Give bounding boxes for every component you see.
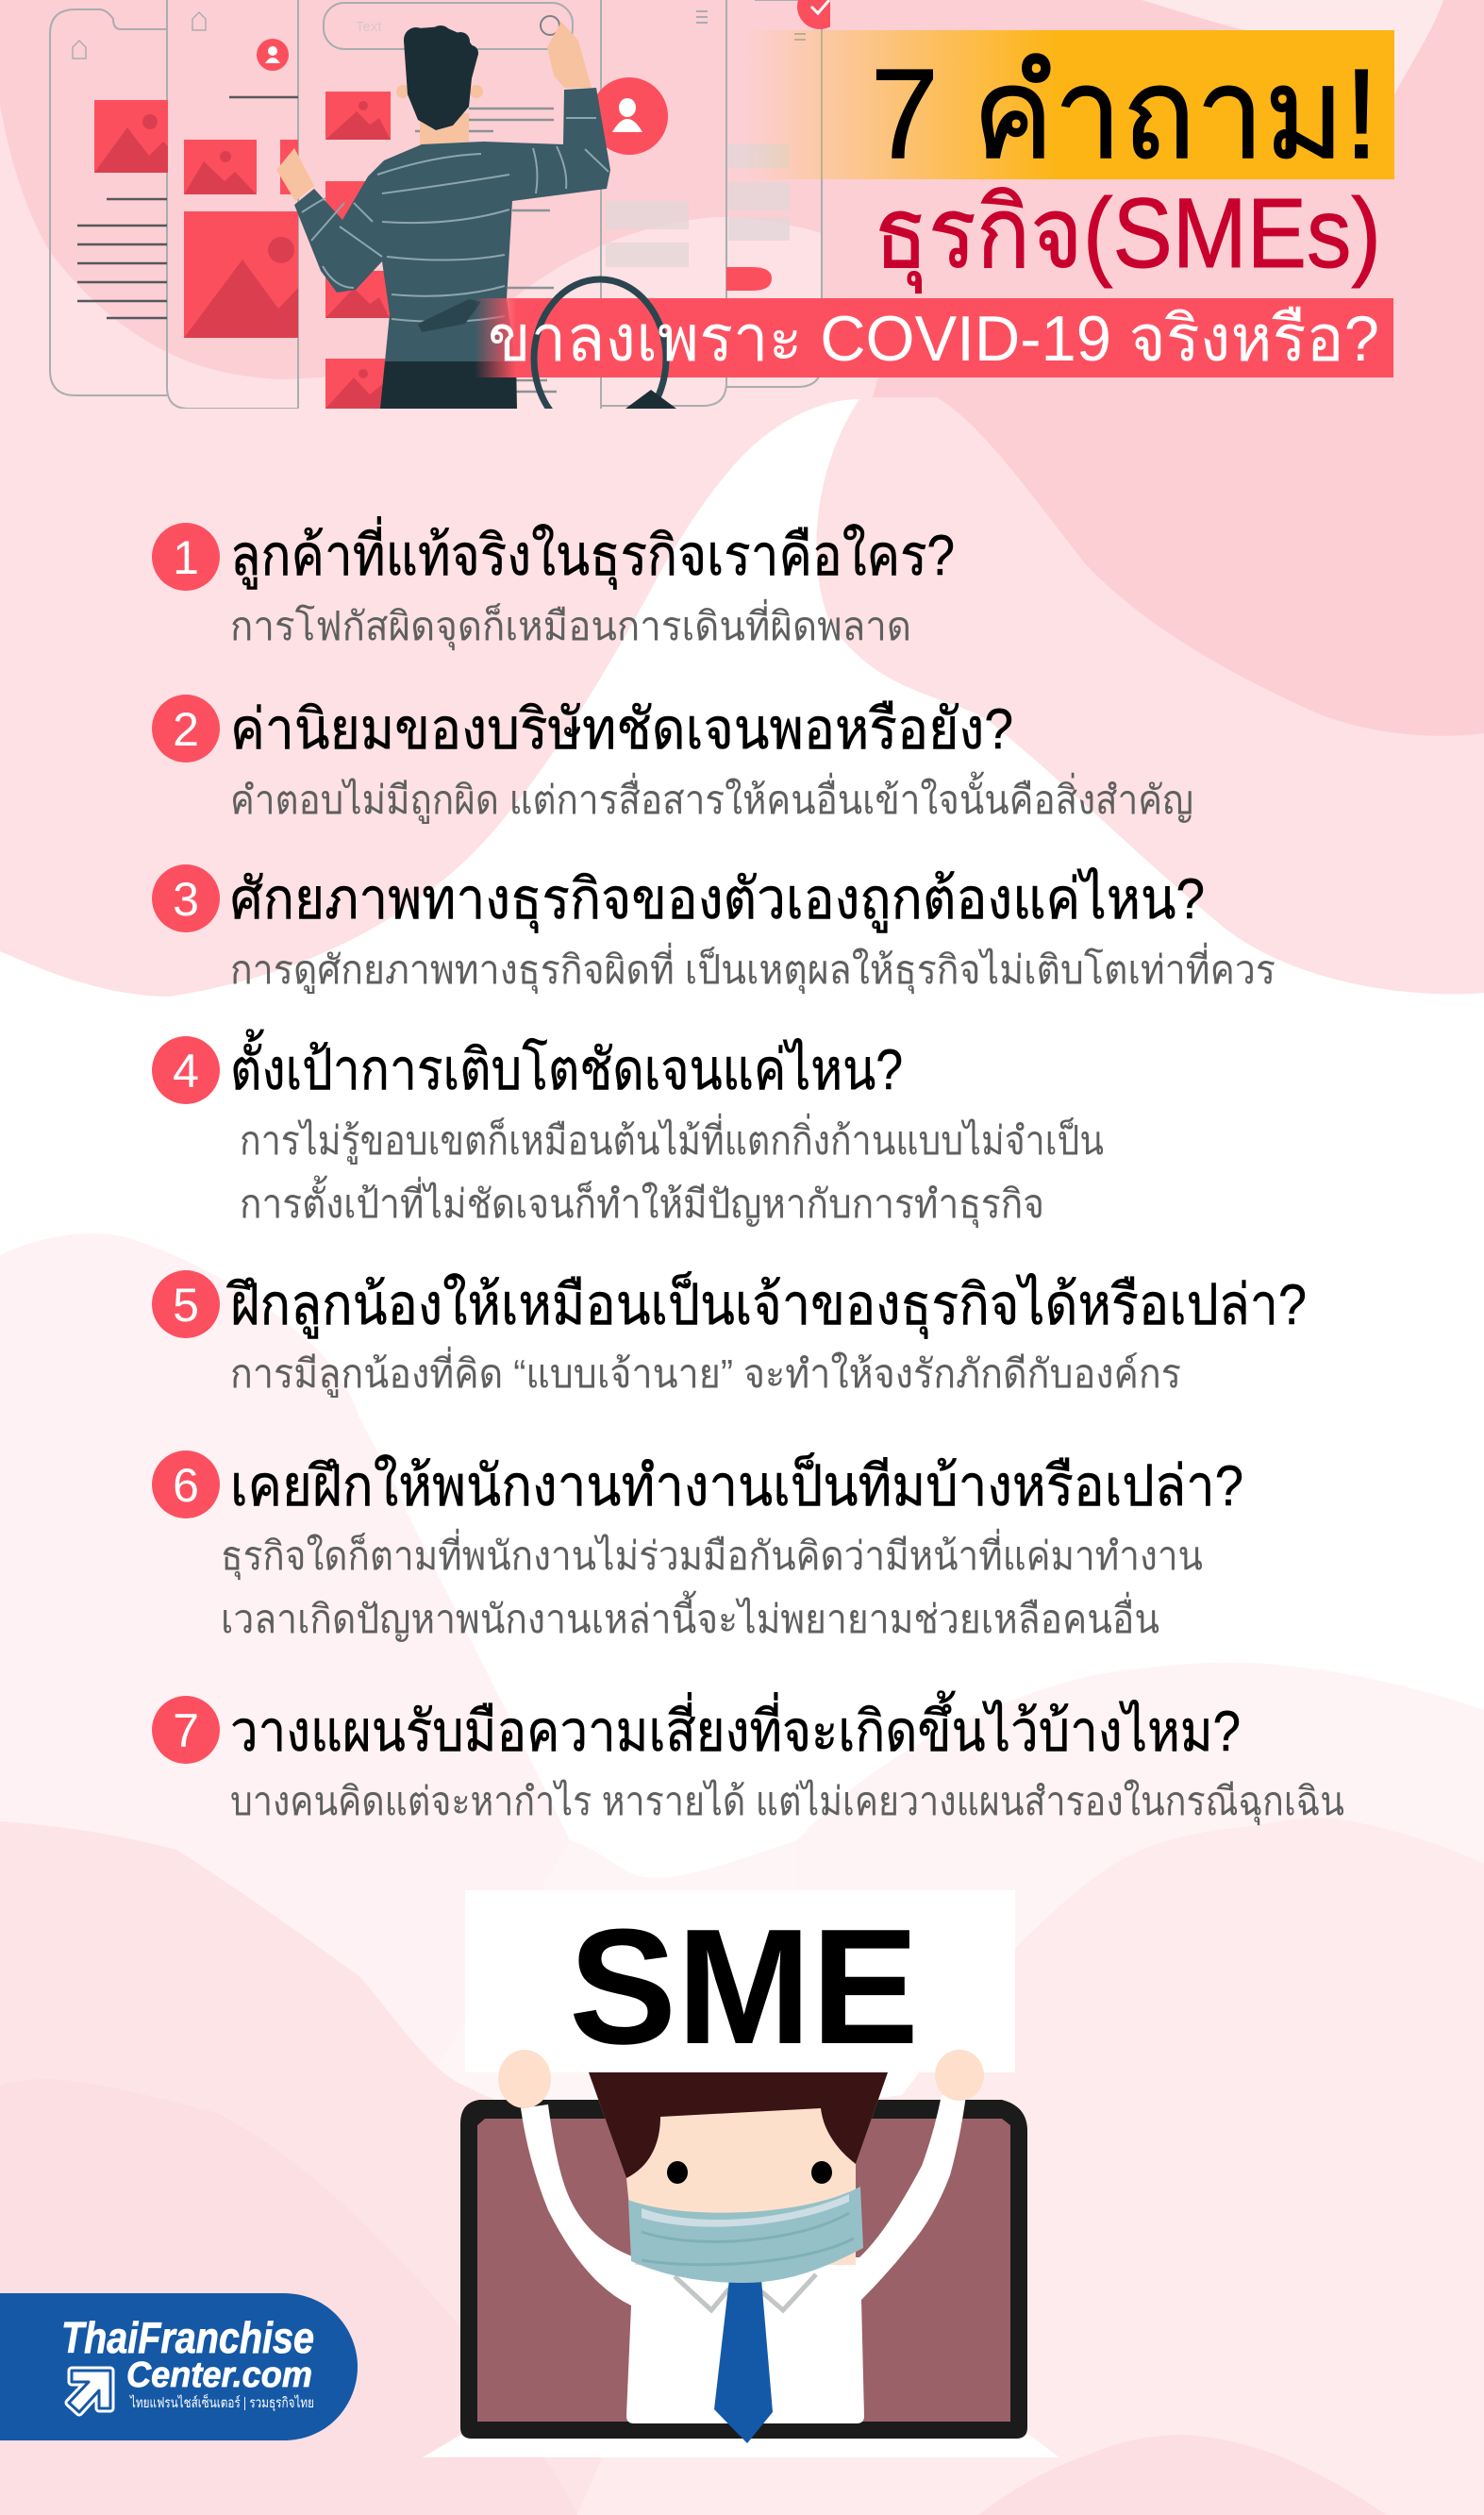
logo: ThaiFranchiseCenter.com — [0, 2293, 358, 2440]
question 4 — [152, 1029, 1104, 1229]
question 7 — [152, 1690, 1344, 1826]
illustration: masked businessman in laptop holding SME sign — [423, 1890, 1059, 2457]
question 3: 3 — [173, 873, 199, 926]
question 4: การไม่รู้ขอบเขตก็เหมือนต้นไม้ที่แตกกิ่งก้านแบบไม่จำเป็น — [240, 1114, 1104, 1165]
text lines — [77, 97, 557, 392]
question 3: การดูศักยภาพทางธุรกิจผิดที่ เป็นเหตุผลให้ธุรกิจไม่เติบโตเท่าที่ควร — [230, 943, 1276, 995]
question 6: เวลาเกิดปัญหาพนักงานเหล่านี้จะไม่พยายามช่วยเหลือคนอื่น — [221, 1590, 1159, 1642]
search placeholder: Text — [356, 19, 382, 35]
question 6 — [152, 1450, 1243, 1642]
man's body and arms — [521, 2095, 966, 2423]
logo: ThaiFranchiseCenter.com: ไทยแฟรนไชส์เซ็นเตอร์ | รวมธุรกิจไทย — [129, 2393, 314, 2412]
question 2: คำตอบไม่มีถูกผิด แต่การสื่อสารให้คนอื่นเข้าใจนั้นคือสิ่งสำคัญ — [230, 771, 1193, 824]
question 6: ธุรกิจใดก็ตามที่พนักงานไม่ร่วมมือกันคิดว่ามีหน้าที่แค่มาทำงาน — [221, 1529, 1203, 1581]
hands — [498, 2050, 984, 2108]
sweater — [294, 88, 610, 361]
pants — [380, 359, 517, 409]
question 7: บางคนคิดแต่จะหากำไร หารายได้ แต่ไม่เคยวางแผนสำรองในกรณีฉุกเฉิน — [230, 1779, 1344, 1826]
laptop — [423, 2100, 1059, 2457]
logo: ThaiFranchiseCenter.com: ThaiFranchise — [61, 2313, 314, 2362]
question 4: การตั้งเป้าที่ไม่ชัดเจนก็ทำให้มีปัญหากับการทำธุรกิจ — [240, 1175, 1044, 1229]
question 6: 6 — [173, 1459, 199, 1512]
question 1: 1 — [173, 531, 199, 584]
question 3 — [152, 864, 1276, 995]
illustration: man browsing phone screens — [50, 0, 842, 409]
question 1 — [152, 516, 955, 651]
logo: ThaiFranchiseCenter.com: Center.com — [126, 2356, 312, 2395]
sign: SME: SME — [569, 1894, 919, 2078]
question 5: ฝึกลูกน้องให้เหมือนเป็นเจ้าของธุรกิจได้หรือเปล่า? — [226, 1271, 1307, 1339]
subtitle: SMEs: ธุรกิจ(SMEs) — [874, 178, 1381, 293]
question 2: ค่านิยมของบริษัทชัดเจนพอหรือยัง? — [230, 697, 1013, 761]
face mask — [628, 2187, 863, 2283]
question 2 — [152, 695, 1193, 824]
head — [589, 2072, 888, 2265]
question 5: 5 — [173, 1279, 199, 1332]
question 7: วางแผนรับมือความเสี่ยงที่จะเกิดขึ้นไว้บ้างไหม? — [230, 1690, 1241, 1763]
question 4: 4 — [173, 1045, 199, 1098]
necktie — [714, 2279, 773, 2443]
hair — [404, 25, 478, 130]
question 7: 7 — [173, 1704, 199, 1757]
question 2: 2 — [173, 703, 199, 756]
magnifier — [530, 276, 676, 409]
question 6: เคยฝึกให้พนักงานทำงานเป็นทีมบ้างหรือเปล่า? — [230, 1452, 1243, 1517]
title: gold banner: 7 คำถาม! — [871, 42, 1378, 185]
phone wireframes — [50, 0, 822, 409]
question 5: การมีลูกน้องที่คิด “แบบเจ้านาย” จะทำให้จงรักภักดีกับองค์กร — [230, 1347, 1181, 1398]
question 4: ตั้งเป้าการเติบโตชัดเจนแค่ไหน? — [230, 1029, 903, 1101]
subtitle: red banner text: ขาลงเพราะ COVID-19 จริงหรือ? — [488, 303, 1379, 375]
grey placeholder blocks — [606, 144, 790, 267]
red image cards — [94, 92, 772, 409]
question 5 — [152, 1270, 1307, 1398]
icon: logo arrow — [69, 2371, 110, 2412]
question 1: การโฟกัสผิดจุดก็เหมือนการเดินที่ผิดพลาด — [230, 599, 911, 651]
sign: SME — [465, 1890, 1015, 2078]
hands and neck — [547, 22, 592, 88]
avatar icons — [257, 0, 842, 155]
red banner background — [475, 298, 1393, 377]
collar — [675, 2274, 816, 2310]
man — [276, 22, 610, 409]
question 1: ลูกค้าที่แท้จริงในธุรกิจเราคือใคร? — [230, 516, 955, 590]
question 3: ศักยภาพทางธุรกิจของตัวเองถูกต้องแค่ไหน? — [230, 866, 1205, 933]
